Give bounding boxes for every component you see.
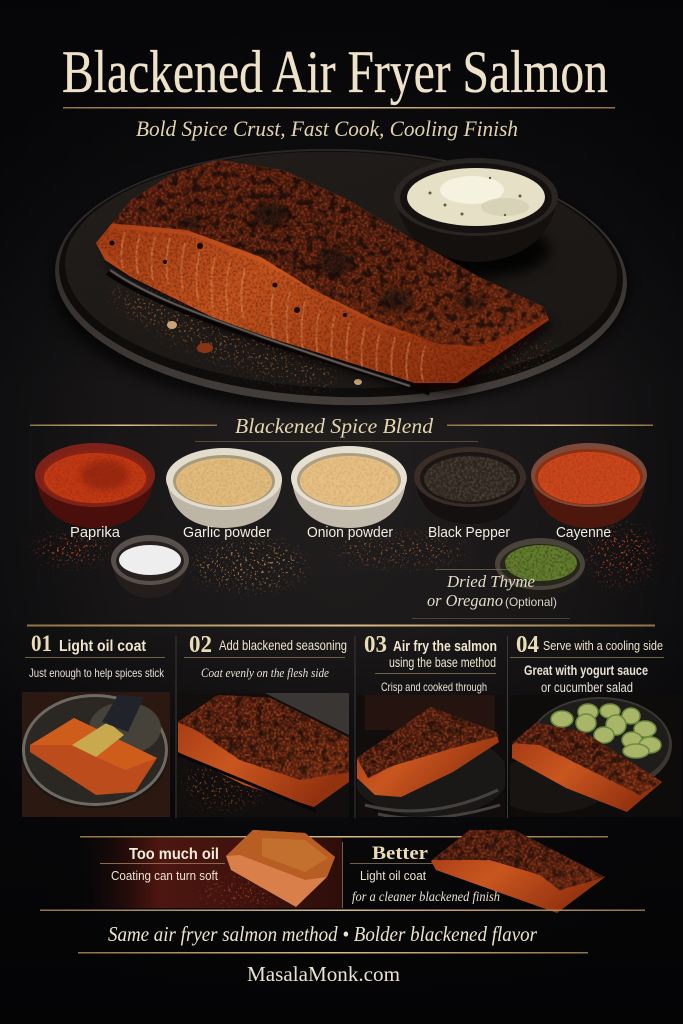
step 03 heading: Air fry the salmon [393,638,497,655]
salmon fillet [96,160,552,392]
too much oil text [100,846,225,883]
spice labels: Onion powder [307,524,393,541]
comparison divider [342,842,343,908]
step 04 caption: Great with yogurt sauce [524,663,648,678]
plate [52,142,630,413]
thyme label [412,569,570,619]
sauce drip highlight [108,272,430,392]
too much oil text: Coating can turn soft [111,868,218,883]
step 02 [177,632,349,817]
comparison: too much oil [80,830,342,908]
step 04 heading [510,632,664,658]
spice bowl: garlic powder [166,448,282,528]
spice labels: Cayenne [556,524,611,541]
step 03 heading: 03 [364,632,387,658]
thyme label: (Optional) [505,595,557,609]
better text: Better [372,843,429,864]
tagline rule [78,952,588,954]
comparison: better [350,830,605,913]
spice bowl: dried thyme [495,538,585,598]
step 03 heading: using the base method [389,654,496,670]
blackened salmon piece [431,830,605,913]
spilled spice scatter [36,527,652,587]
spice crumbs on plate [104,266,555,404]
comparison bottom rule [40,910,645,911]
subtitle: Bold Spice Crust, Fast Cook, Cooling Finish [136,116,518,141]
step 01 [22,631,170,817]
step 04 photo [510,697,682,816]
steps divider rule [27,624,655,626]
step 02 heading: 02 [189,632,212,658]
spice labels [70,524,611,541]
step 03 [352,632,508,818]
step 03 caption: Crisp and cooked through [381,680,487,694]
spice blend heading: Blackened Spice Blend [235,414,434,438]
better text: for a cleaner blackened finish [352,890,500,905]
step 02 heading: Add blackened seasoning [219,637,347,653]
hero plate with salmon and sauce [52,142,630,413]
spice labels: Black Pepper [428,524,510,541]
step 01 caption: Just enough to help spices stick [29,666,165,680]
spice bowl: salt [111,535,189,598]
cucumbers [551,704,661,758]
better text [350,843,500,905]
flesh lines [121,232,425,382]
step 03 heading [364,632,497,674]
step 01 heading: 01 [31,631,52,656]
step 03 photo [352,695,508,818]
thyme label: or Oregano [427,591,503,610]
step 04 heading: Serve with a cooling side [543,638,663,653]
step 01 heading [25,631,165,658]
column dividers [176,636,508,818]
spice bowl: onion powder [291,446,407,528]
step 04 [510,636,682,816]
step 01 heading: Light oil coat [59,638,147,655]
step 04 heading: 04 [516,632,539,658]
step 02 heading [184,632,347,658]
step 01 photo [22,692,170,817]
too much oil text: Too much oil [129,846,219,863]
spice labels: Paprika [70,524,121,541]
better text: Light oil coat [360,868,426,883]
step 04 caption: or cucumber salad [541,680,633,695]
spice bowl: paprika [35,443,155,528]
oily salmon piece [226,830,335,907]
website: MasalaMonk.com [247,962,400,986]
thyme label: Dried Thyme [446,572,535,591]
sauce bowl [394,158,558,278]
spice bowl: black pepper [414,447,526,524]
comparison rule [80,836,608,838]
step 02 photo [177,693,349,817]
pepper flecks on flesh [110,240,347,317]
step 02 caption: Coat evenly on the flesh side [201,665,329,680]
spice bowl: cayenne [531,443,647,528]
spice labels: Garlic powder [183,524,271,541]
step 04 caption [524,663,648,695]
tagline: Same air fryer salmon method • Bolder blackened flavor [108,922,538,946]
title rule [63,107,615,108]
